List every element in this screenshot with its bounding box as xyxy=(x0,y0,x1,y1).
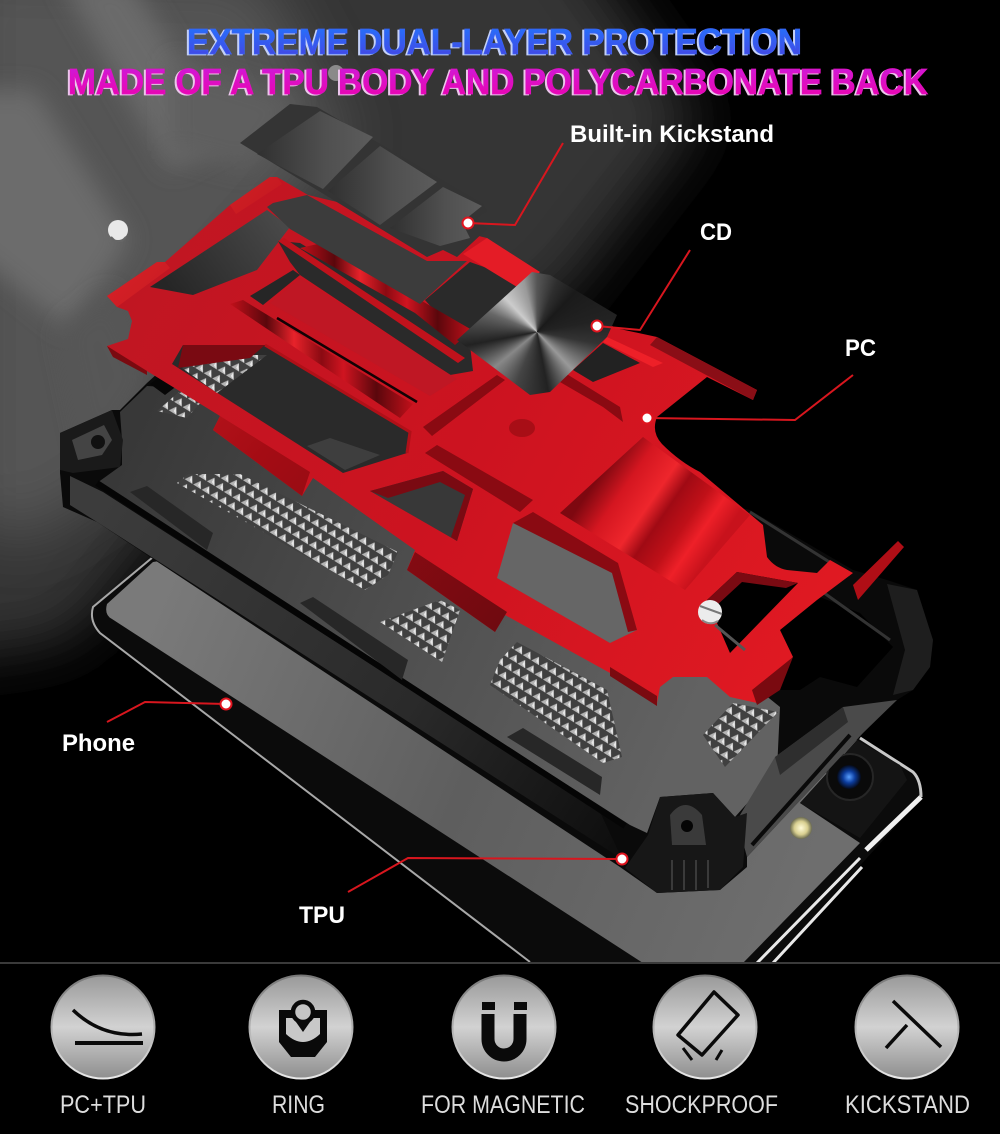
screw: right xyxy=(698,600,722,624)
edge tabs xyxy=(107,177,507,632)
feature: PC+TPU: PC+TPU xyxy=(60,1091,146,1119)
bottom feature strip xyxy=(0,962,1000,1134)
callout: PC xyxy=(642,335,876,424)
small black clip xyxy=(150,375,178,395)
right side wall xyxy=(737,700,897,857)
upper arm xyxy=(278,238,465,363)
lower strap xyxy=(230,300,413,418)
corner right xyxy=(887,584,933,695)
callout: TPU xyxy=(299,854,628,929)
callout: TPU: TPU xyxy=(299,902,345,929)
callout: built-in kickstand xyxy=(462,121,774,228)
upper strap xyxy=(300,243,472,345)
kickstand flat xyxy=(267,195,467,304)
hole: centre right xyxy=(497,512,637,643)
callout: PC: PC xyxy=(845,335,876,362)
TPU case xyxy=(60,373,933,893)
title line 2: MADE OF A TPU BODY AND POLYCARBONATE BACK xyxy=(68,61,928,102)
hole: triangle xyxy=(370,471,473,541)
title xyxy=(68,21,928,102)
screw: left xyxy=(108,220,128,241)
upper shiny bar xyxy=(463,238,540,290)
case side wall xyxy=(70,476,622,859)
callout: built-in kickstand: Built-in Kickstand xyxy=(570,121,774,148)
centre plate xyxy=(270,278,457,396)
feature: PC+TPU xyxy=(52,976,154,1119)
rail xyxy=(97,483,625,826)
feature: shockproof: SHOCKPROOF xyxy=(625,1091,778,1119)
plate bevels xyxy=(423,375,533,512)
phone camera module xyxy=(800,740,907,838)
kickstand panels xyxy=(257,111,373,189)
feature: kickstand xyxy=(845,976,970,1119)
rail bumps xyxy=(130,486,602,795)
hole: right window xyxy=(707,572,798,653)
kickstand block xyxy=(240,104,487,257)
phone glass xyxy=(106,540,860,963)
callout: CD: CD xyxy=(700,219,732,246)
callout: phone xyxy=(62,698,232,757)
callout: phone: Phone xyxy=(62,730,135,757)
background light rays xyxy=(0,0,700,660)
phone right rim highlights xyxy=(757,858,862,963)
faint screw behind title xyxy=(328,65,344,81)
dark box xyxy=(250,270,300,305)
corner top-left xyxy=(60,410,123,473)
camera lens xyxy=(827,754,873,800)
case top surface xyxy=(97,386,780,833)
hole: under kickstand xyxy=(425,262,540,345)
feature: ring xyxy=(250,976,352,1119)
mesh grip pads xyxy=(157,391,778,767)
grip xyxy=(560,437,750,590)
red PC frame xyxy=(107,177,904,706)
hole: upper left xyxy=(150,210,290,295)
feature: kickstand: KICKSTAND xyxy=(845,1091,970,1119)
flash xyxy=(790,817,812,839)
corner bottom xyxy=(625,793,747,893)
callout: CD xyxy=(592,219,732,332)
bright band right of CD xyxy=(603,337,663,367)
feature: ring: RING xyxy=(272,1091,325,1119)
end handle xyxy=(853,541,904,600)
feature: magnet: FOR MAGNETIC xyxy=(421,1091,585,1119)
hole: right of CD xyxy=(573,343,640,382)
recess under kickstand xyxy=(278,241,473,375)
CD plate xyxy=(457,272,617,395)
feature: shockproof xyxy=(625,976,778,1119)
feature: magnet xyxy=(421,976,585,1119)
hole: lower left xyxy=(172,345,410,473)
title line 1: EXTREME DUAL-LAYER PROTECTION xyxy=(187,21,802,62)
window at right xyxy=(767,597,893,690)
phone xyxy=(92,540,922,963)
bump xyxy=(509,419,535,437)
